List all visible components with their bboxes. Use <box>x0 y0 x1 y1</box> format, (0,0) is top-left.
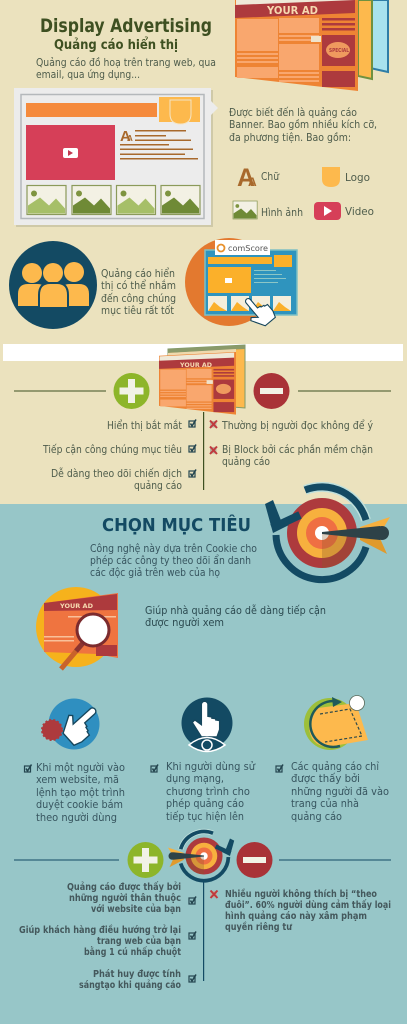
targeting description: Công nghệ này dựa trên Cookie cho <box>90 543 257 555</box>
column: cookie tracking: duyệt cookie bám <box>36 799 123 811</box>
column: browsing: dụng mạng, <box>166 773 224 785</box>
icon: plus <box>128 842 164 878</box>
legend: video: Video <box>345 206 374 218</box>
legend: logo <box>322 167 370 187</box>
white band <box>3 344 403 361</box>
image thumbnails <box>27 186 200 214</box>
pros list: Dễ dàng theo dõi chiến dịch <box>51 467 182 480</box>
helper text: Giúp nhà quảng cáo dễ dàng tiếp cận <box>145 604 326 617</box>
divider left <box>14 860 119 861</box>
audience text: thị có thể nhắm <box>101 279 176 292</box>
pros list <box>42 419 196 492</box>
intro text <box>36 57 216 81</box>
divider right <box>298 390 391 392</box>
comScore logo: comScore <box>228 244 268 253</box>
pros list: bằng 1 cú nhấp chuột <box>84 947 181 958</box>
banner description: đa phương tiện. Bao gồm: <box>229 132 351 144</box>
cons list: Thường bị người đọc không để ý <box>221 419 373 432</box>
pros list: Tiếp cận công chúng mục tiêu <box>42 444 182 456</box>
legend: text: A <box>248 175 257 189</box>
pros list: sángtạo khi quảng cáo <box>79 980 181 991</box>
divider left <box>14 390 106 392</box>
video block <box>26 125 115 180</box>
vertical divider <box>203 412 204 490</box>
banner description: Được biết đến là quảng cáo <box>229 107 357 119</box>
pros list: Quảng cáo được thấy bởi <box>67 882 181 893</box>
targeting description: các độc giả trên web của họ <box>90 567 220 579</box>
pros list <box>19 882 196 991</box>
column: cookie tracking: theo người dùng <box>36 812 117 824</box>
column: retargeted visitors: quảng cáo <box>291 811 342 823</box>
banner description <box>229 107 377 144</box>
logo block <box>159 97 200 124</box>
column: cookie tracking: xem website, mã <box>36 774 119 786</box>
audience text: mục tiêu rất tốt <box>101 305 174 317</box>
legend: text <box>237 164 280 192</box>
icon: minus <box>236 842 272 878</box>
column: browsing: chương trình cho <box>166 786 250 798</box>
illustration: stacked ad sheets: YOUR AD <box>266 5 318 17</box>
illustration: magnifier on ad <box>36 587 118 669</box>
column: retargeted visitors: Các quảng cáo chỉ <box>291 761 379 773</box>
icon: plus <box>114 373 150 409</box>
legend: image <box>233 201 303 219</box>
subtitle: Quảng cáo hiển thị <box>54 37 178 53</box>
pros list: Giúp khách hàng điều hướng trở lại <box>19 925 181 936</box>
intro text: email, qua ứng dụng... <box>36 69 140 81</box>
cons list: hình quảng cáo này xâm phạm <box>225 911 367 922</box>
illustration: comScore targeted ad <box>185 238 297 331</box>
legend: text: Chữ <box>261 171 280 183</box>
illustration: stacked ad sheets <box>235 0 388 91</box>
vertical divider <box>203 881 204 981</box>
title: Display Advertising <box>40 15 212 37</box>
pros list: với website của bạn <box>91 904 181 915</box>
column: browsing <box>151 761 256 823</box>
text block <box>120 128 198 160</box>
pros list: quảng cáo <box>134 480 182 492</box>
column: retargeted visitors <box>276 761 389 823</box>
column: browsing: tiếp tục hiện lên <box>166 811 244 823</box>
illustration: magnifier on ad: YOUR AD <box>59 602 94 610</box>
icon: cookie hand <box>42 698 105 750</box>
cons list: Nhiều người không thích bị “theo <box>225 889 377 900</box>
illustration: ad sheet pros/cons: YOUR AD <box>179 361 213 369</box>
targeting description: phép các công ty theo dõi ẩn danh <box>90 554 251 567</box>
audience text <box>101 267 176 317</box>
orange banner bar <box>26 103 157 117</box>
heading: targeting: CHỌN MỤC TIÊU <box>102 514 251 536</box>
text block: A <box>120 128 131 145</box>
column: cookie tracking: lệnh tạo một trình <box>36 787 125 799</box>
banner description: Banner. Bao gồm nhiều kích cỡ, <box>229 119 377 131</box>
column: browsing: Khi người dùng sử <box>166 761 256 773</box>
pros list: Phát huy được tính <box>93 969 181 980</box>
column: retargeted visitors: trang của nhà <box>291 798 359 810</box>
audience text: Quảng cáo hiển <box>101 267 175 280</box>
column: cookie tracking <box>24 762 125 824</box>
icon: pointer hand <box>238 291 277 331</box>
legend: text: A <box>237 164 255 192</box>
icon: target with arrow <box>265 487 390 580</box>
column: retargeted visitors: được thấy bởi <box>291 773 360 785</box>
icon: audience <box>9 241 97 329</box>
cons list: Bị Block bởi các phần mềm chặn <box>222 444 373 456</box>
divider right <box>279 860 391 861</box>
column: cookie tracking: Khi một người vào <box>36 762 125 774</box>
icon: retargeting ticket <box>304 696 368 750</box>
icon: minus <box>254 373 290 409</box>
cons list <box>210 889 391 933</box>
text block: A <box>127 134 133 143</box>
panel: banner ad mockup <box>14 88 218 227</box>
cons list <box>210 419 373 468</box>
teal background <box>0 504 407 1024</box>
pros list: những người thân thuộc <box>69 893 181 904</box>
helper text: được người xem <box>145 617 224 629</box>
illustration: stacked ad sheets: SPECIAL <box>329 48 350 54</box>
icon: eye and hand <box>182 698 232 752</box>
cons list: quảng cáo <box>222 456 270 468</box>
icon: small target <box>168 832 234 881</box>
legend: image: Hình ảnh <box>261 207 303 219</box>
helper text <box>145 604 326 629</box>
audience text: đến công chúng <box>101 293 176 305</box>
pros list: Hiển thị bắt mắt <box>107 419 182 432</box>
intro text: Quảng cáo đồ hoạ trên trang web, qua <box>36 57 216 69</box>
legend: video <box>314 202 374 220</box>
illustration: ad sheet pros/cons <box>159 345 245 415</box>
targeting description <box>90 543 257 579</box>
column: browsing: phép quảng cáo <box>166 798 244 810</box>
pros list: trang web của bạn <box>97 936 181 947</box>
legend: logo: Logo <box>345 172 370 184</box>
cons list: quyền riêng tư <box>225 922 292 933</box>
column: retargeted visitors: những người đã vào <box>291 786 389 798</box>
beige background <box>0 0 407 505</box>
